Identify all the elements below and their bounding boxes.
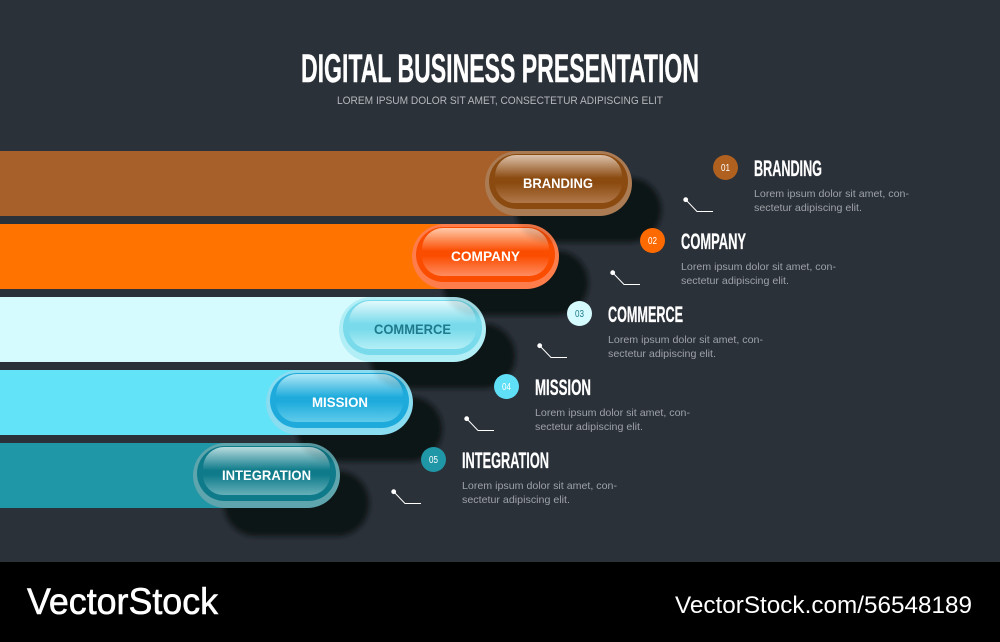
connector 05 [391, 489, 421, 504]
shadow overlay from mission pill [297, 397, 442, 461]
bar 04: mission [0, 370, 413, 435]
subtitle: LOREM IPSUM DOLOR SIT AMET, CONSECTETUR ADIPISCING ELIT [337, 95, 663, 107]
pill: mission: MISSION [312, 394, 368, 410]
bar 01: branding [0, 151, 632, 216]
description 04 [535, 407, 690, 433]
pill: commerce: COMMERCE [374, 321, 451, 337]
description 04: Lorem ipsum dolor sit amet, con- [535, 407, 690, 419]
description 03: Lorem ipsum dolor sit amet, con- [608, 334, 763, 346]
item 03: commerce text [537, 301, 763, 360]
description 01: sectetur adipiscing elit. [754, 202, 862, 214]
description 02: sectetur adipiscing elit. [681, 275, 789, 287]
pill: commerce [339, 297, 486, 362]
number badge 05: 05 [429, 455, 438, 466]
shadow overlay from branding pill [516, 178, 661, 242]
bar 02: company [0, 224, 559, 289]
number badge 05 [421, 447, 446, 472]
pill drop shadows [224, 178, 661, 536]
footer band [0, 562, 1000, 642]
description 05: Lorem ipsum dolor sit amet, con- [462, 480, 617, 492]
heading 05: INTEGRATION [462, 448, 549, 473]
title: DIGITAL BUSINESS PRESENTATION [301, 47, 699, 91]
item 05: integration text [391, 447, 617, 506]
description 03 [608, 334, 763, 360]
description 01: Lorem ipsum dolor sit amet, con- [754, 188, 909, 200]
heading 03: COMMERCE [608, 302, 683, 327]
heading 02: COMPANY [681, 229, 746, 254]
shadow overlay from commerce pill [370, 324, 515, 388]
connector 04 [464, 416, 494, 430]
description 05: sectetur adipiscing elit. [462, 494, 570, 506]
pill: integration: INTEGRATION [222, 467, 311, 483]
number badge 04 [494, 374, 519, 399]
description 05 [462, 480, 617, 506]
pill: integration [193, 443, 340, 508]
bar 03: commerce [0, 297, 486, 362]
footer url: VectorStock.com/56548189 [675, 592, 972, 619]
number badge 03 [567, 301, 592, 326]
pill: company: COMPANY [451, 248, 521, 264]
pill: branding: BRANDING [523, 175, 593, 191]
number badge 04: 04 [502, 382, 511, 393]
pill: company [412, 224, 559, 289]
description 01 [754, 188, 909, 214]
connector 02 [610, 270, 640, 284]
pill: mission [266, 370, 413, 435]
number badge 03: 03 [575, 309, 584, 320]
number badge 02: 02 [648, 236, 657, 247]
description 04: sectetur adipiscing elit. [535, 421, 643, 433]
number badge 02 [640, 228, 665, 253]
description 03: sectetur adipiscing elit. [608, 348, 716, 360]
description 02 [681, 261, 836, 287]
description 02: Lorem ipsum dolor sit amet, con- [681, 261, 836, 273]
heading 01: BRANDING [754, 156, 822, 181]
heading 04: MISSION [535, 375, 591, 400]
footer logo: VectorStock [27, 581, 218, 622]
number badge 01 [713, 155, 738, 180]
item 02: company text [610, 228, 836, 287]
connector 03 [537, 343, 567, 358]
shadow overlay from company pill [443, 251, 588, 315]
connector 01 [683, 197, 713, 212]
item 01: branding text [683, 155, 909, 214]
item 04: mission text [464, 374, 690, 433]
pill: branding [485, 151, 632, 216]
bar 05: integration [0, 443, 340, 508]
number badge 01: 01 [721, 163, 730, 174]
